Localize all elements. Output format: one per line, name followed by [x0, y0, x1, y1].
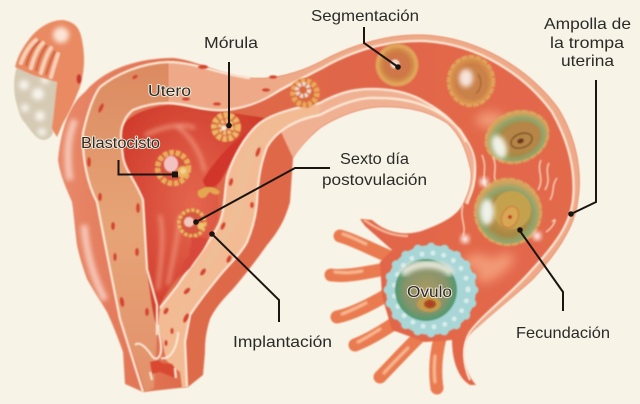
embryo: fecundation [461, 178, 541, 245]
label: Ampolla de la trompa uterina: Ampolla de [544, 16, 631, 33]
ovary [14, 66, 57, 140]
leader: Fecundación [517, 227, 563, 311]
label: Ovulo: Ovulo [407, 284, 452, 301]
label: Sexto día postovulación: postovulación [322, 172, 427, 189]
embryo: segmentation [378, 46, 416, 84]
leader: Mórula [226, 62, 232, 128]
cavity fold highlights [145, 125, 205, 290]
embryo: blastocyst [156, 151, 190, 185]
embryo: two-cell stage [448, 56, 494, 106]
cervix folds [135, 325, 178, 380]
embryo: morula in tube [290, 78, 320, 108]
embryo: green-ringed stage [478, 103, 556, 171]
tube lower pale band [280, 89, 476, 204]
small yellow free embryo [198, 187, 220, 198]
fimbriae fingers [331, 234, 440, 388]
right wall pale band [158, 103, 320, 388]
leader: Implantación [209, 231, 279, 322]
label: Fecundación: Fecundación [516, 325, 610, 342]
label: Ampolla de la trompa uterina: la trompa [550, 35, 624, 52]
uterus and tube silhouette [58, 35, 579, 392]
label: Utero: Utero [148, 83, 191, 100]
upper frill of tube [364, 220, 408, 236]
leader: Ampolla [568, 80, 596, 217]
tube lumen highlights [464, 112, 518, 288]
label: Segmentación: Segmentación [311, 8, 419, 25]
left highlight of uterus body [68, 120, 105, 300]
sperm tails and sparks [462, 155, 557, 236]
label: Ampolla de la trompa uterina: uterina [561, 53, 614, 70]
leader: Segmentación [364, 27, 401, 70]
tube upper pale band [168, 35, 579, 330]
label: Implantación: Implantación [233, 334, 332, 351]
leader: Blastocisto [118, 160, 178, 178]
uterine top-left sectioned wall [83, 62, 168, 392]
label: Sexto día postovulación [322, 151, 427, 189]
dark red fold by right wall [203, 128, 255, 188]
label: Blastocisto: Blastocisto [81, 135, 160, 152]
right wall inner tan band [175, 122, 280, 330]
white endometrium lines [83, 41, 574, 392]
uterine cavity [121, 105, 265, 325]
left tube fimbrial end [15, 20, 84, 137]
leader: Sexto día [193, 168, 330, 225]
label: Mórula: Mórula [204, 35, 258, 52]
small red vessels [87, 65, 277, 346]
label: Ampolla de la trompa uterina [544, 16, 631, 70]
implanted embryo [176, 210, 208, 280]
ovum [386, 245, 476, 335]
embryo: morula [211, 112, 241, 142]
label: Sexto día postovulación: Sexto día [340, 151, 409, 168]
